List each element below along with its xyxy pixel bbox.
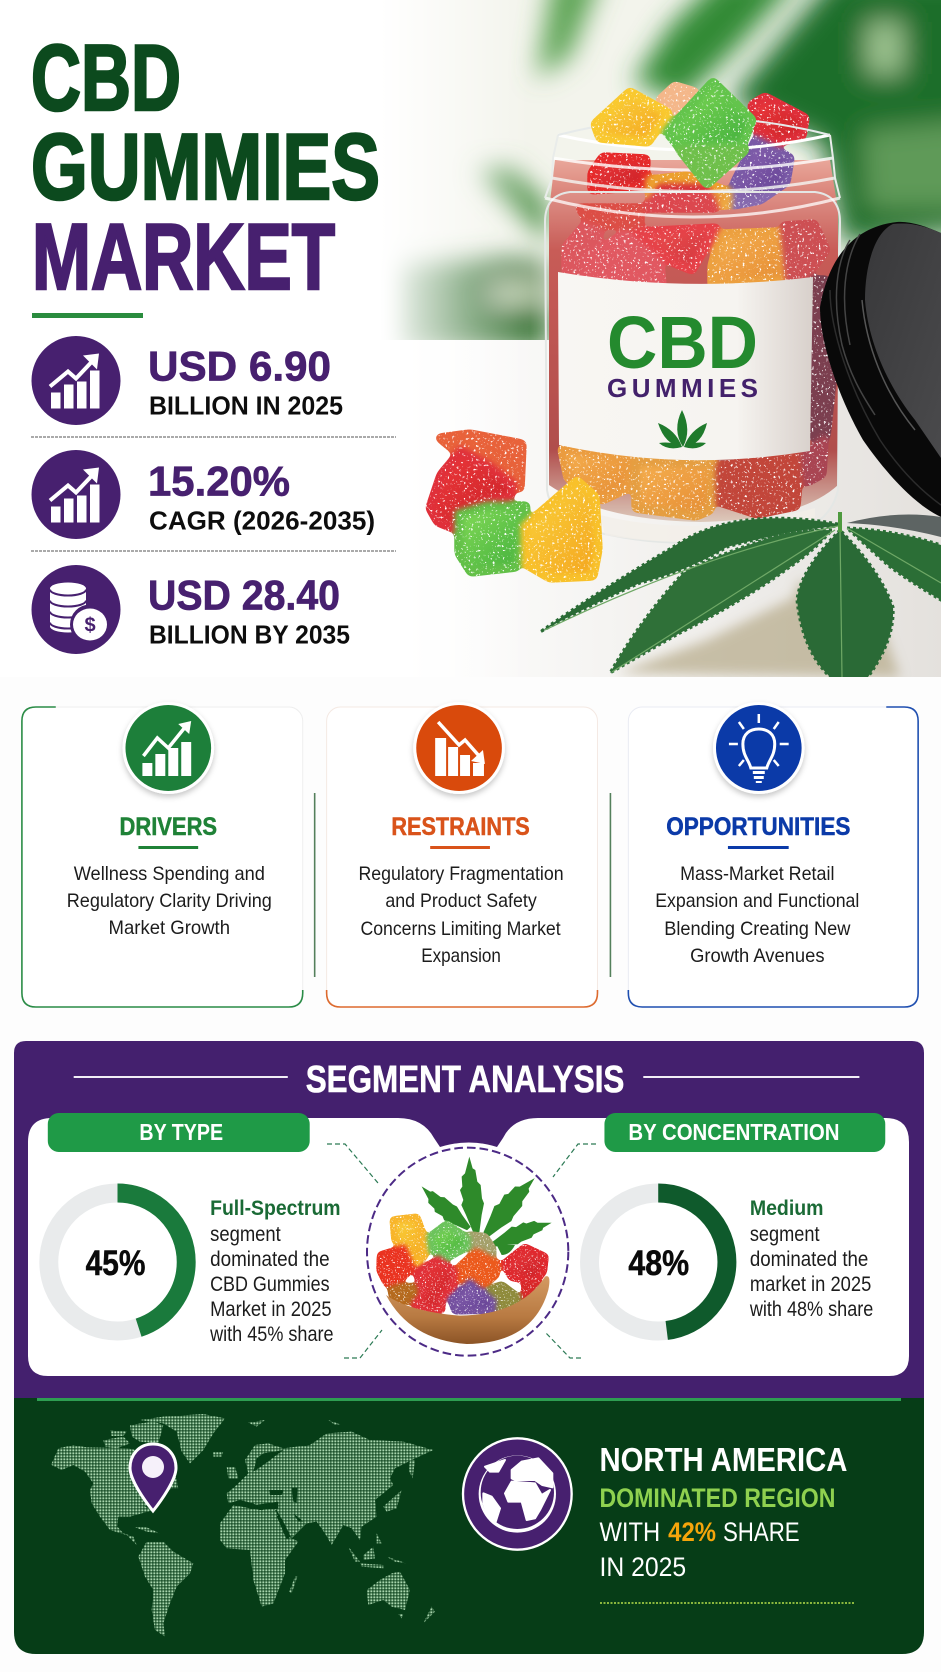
- by concentration text: segment: [750, 1223, 820, 1246]
- drivers text: [67, 863, 272, 939]
- donut chart: 45 percent: 45%: [86, 1244, 145, 1283]
- icon: coins: $: [84, 614, 96, 636]
- by concentration text: Medium: [750, 1197, 824, 1220]
- segment heading: SEGMENT ANALYSIS: [306, 1059, 624, 1101]
- glass jar: [545, 118, 840, 543]
- icon: rising chart: [122, 702, 214, 794]
- stat: CAGR: [32, 450, 375, 539]
- region text: [599, 1441, 847, 1582]
- stat: market size 2025: BILLION IN 2025: [149, 390, 343, 420]
- cannabis leaf: [540, 512, 941, 677]
- opportunities text: Expansion and Functional: [655, 890, 859, 912]
- restraints text: Expansion: [421, 945, 501, 967]
- drivers text: Market Growth: [109, 917, 230, 939]
- stat: market size 2035: BILLION BY 2035: [149, 620, 350, 650]
- panel: drivers: [22, 702, 303, 1007]
- label text: GUMMIES: [607, 373, 758, 403]
- opportunities text: Blending Creating New: [664, 918, 851, 940]
- region text: DOMINATED REGION: [599, 1483, 835, 1513]
- loose gummies: [430, 434, 598, 578]
- opportunities text: [655, 863, 859, 967]
- hero section: [0, 0, 941, 677]
- title rule: [32, 313, 143, 318]
- title: GUMMIES: [31, 114, 380, 219]
- wooden bowl: [386, 1276, 549, 1344]
- opportunities text: Mass-Market Retail: [680, 863, 834, 885]
- icon: location pin: [130, 1444, 176, 1511]
- center gummy bowl: [367, 1148, 568, 1356]
- world dot map: [52, 1414, 435, 1637]
- by concentration text: dominated the: [750, 1248, 868, 1271]
- by type text: CBD Gummies: [210, 1273, 330, 1296]
- region text: WITH: [599, 1517, 660, 1547]
- by type text: dominated the: [210, 1248, 330, 1271]
- jar lid: [820, 222, 941, 517]
- donut chart: 48 percent: 48%: [628, 1244, 689, 1283]
- gummies inside jar: [549, 160, 838, 522]
- region text: SHARE: [723, 1517, 800, 1547]
- stat: CAGR: CAGR (2026-2035): [149, 506, 375, 536]
- by concentration text: market in 2025: [750, 1273, 871, 1296]
- donut chart: 45 percent: [49, 1193, 186, 1331]
- stat: market size 2035: USD 28.40: [148, 572, 340, 618]
- by type text: with 45% share: [209, 1323, 334, 1346]
- icon: coins: [32, 565, 120, 654]
- icon: lightbulb: [713, 702, 805, 794]
- opportunities text: Growth Avenues: [690, 945, 825, 967]
- panel: opportunities: OPPORTUNITIES: [666, 813, 850, 841]
- white segment panel: [28, 1118, 909, 1376]
- jar label: [558, 272, 813, 460]
- restraints text: Regulatory Fragmentation: [358, 863, 564, 885]
- panel: restraints: RESTRAINTS: [391, 813, 530, 841]
- region text: NORTH AMERICA: [599, 1441, 847, 1478]
- panel: regional dominance: [14, 1398, 924, 1654]
- by type pill: [48, 1113, 310, 1152]
- icon: growth chart: [32, 450, 120, 539]
- by concentration text: with 48% share: [749, 1298, 873, 1321]
- gummies jar: [545, 82, 840, 543]
- afro-eurasia and australia: [220, 1420, 435, 1623]
- title: [32, 43, 378, 290]
- label text: CBD: [607, 301, 758, 384]
- panels row: [22, 702, 918, 1007]
- icon: falling chart: [413, 702, 505, 794]
- drivers text: Wellness Spending and: [74, 863, 265, 885]
- region text: IN 2025: [599, 1552, 686, 1582]
- panel: opportunities: [628, 702, 918, 1007]
- drivers text: Regulatory Clarity Driving: [67, 890, 272, 912]
- by concentration pill: BY CONCENTRATION: [628, 1119, 839, 1145]
- stat: CAGR: 15.20%: [148, 458, 290, 504]
- gummies: [380, 1217, 545, 1311]
- icon: globe: [463, 1438, 572, 1550]
- title: MARKET: [32, 204, 335, 309]
- stat: market size 2025: USD 6.90: [148, 342, 331, 390]
- panel: segment analysis: [14, 1041, 924, 1402]
- top gummies: [595, 82, 752, 184]
- by concentration text: [749, 1197, 873, 1321]
- title: CBD: [31, 25, 181, 130]
- panel: drivers: DRIVERS: [119, 813, 217, 841]
- by type text: Full-Spectrum: [210, 1197, 341, 1220]
- blurred plant background: [392, 0, 941, 677]
- americas and greenland: [52, 1414, 225, 1637]
- restraints text: [358, 863, 564, 967]
- label text: [608, 316, 757, 448]
- restraints text: Concerns Limiting Market: [360, 918, 561, 940]
- donut chart: 48 percent: [590, 1193, 727, 1331]
- by type pill: BY TYPE: [139, 1119, 223, 1145]
- panel: restraints: [327, 702, 597, 1007]
- restraints text: and Product Safety: [385, 890, 537, 912]
- stat: market size 2035: [32, 565, 350, 654]
- by type text: [209, 1197, 341, 1346]
- by type text: segment: [210, 1223, 281, 1246]
- stat: market size 2025: [32, 336, 343, 425]
- by concentration pill: [604, 1113, 885, 1152]
- by type text: Market in 2025: [210, 1298, 332, 1321]
- icon: growth chart: [32, 336, 120, 425]
- region text: 42%: [668, 1517, 716, 1547]
- leaves: [416, 1157, 555, 1255]
